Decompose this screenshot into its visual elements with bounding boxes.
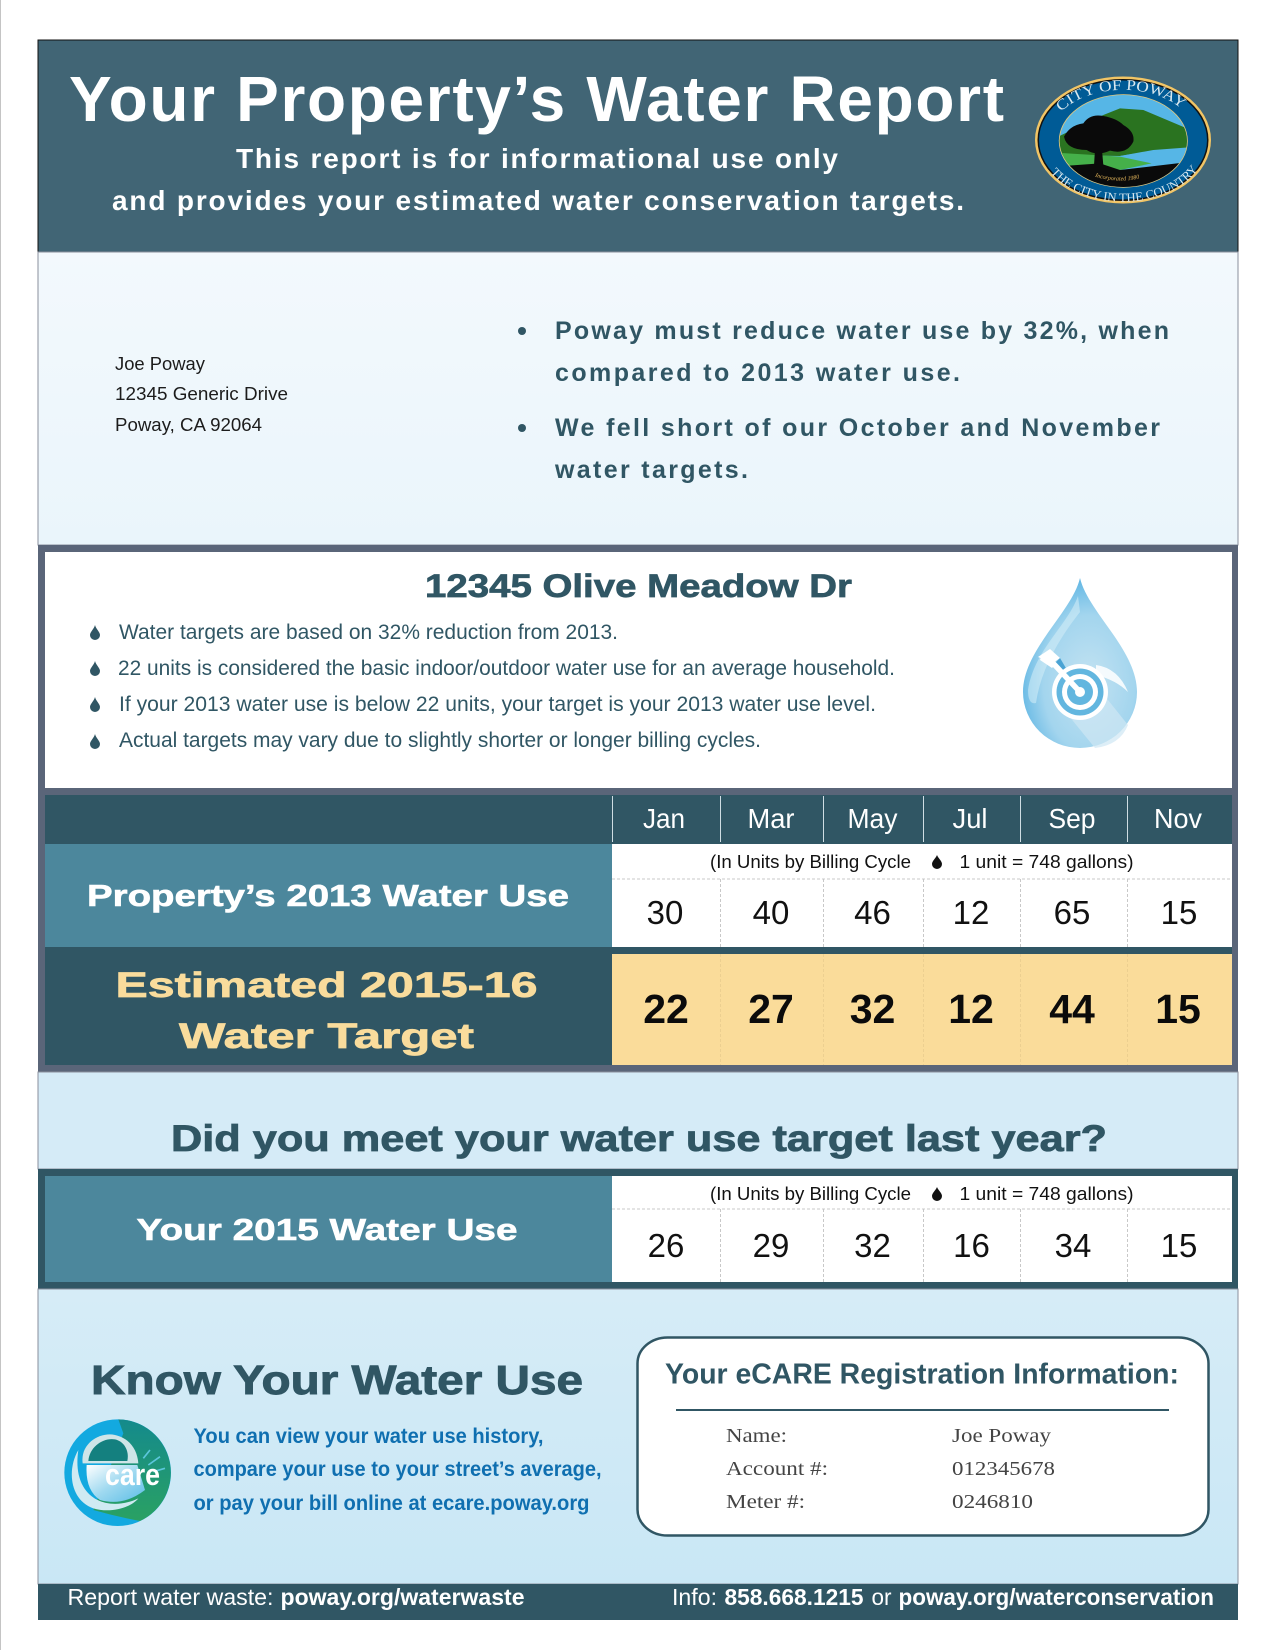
key messages: compared to 2013 water use. <box>555 359 960 387</box>
registration details <box>726 1425 1055 1513</box>
heading: know your water use: Know Your Water Use <box>91 1357 583 1403</box>
panel: header banner <box>38 40 1238 252</box>
row: 2013 water use: 12 <box>953 894 989 931</box>
registration details: 012345678 <box>952 1458 1055 1480</box>
table: 2013 use and estimated target <box>45 795 1232 1065</box>
table header row <box>45 795 1232 844</box>
row: estimated water target: 12 <box>948 986 994 1032</box>
registration details: Name: <box>726 1425 787 1447</box>
table header row: May <box>848 803 898 834</box>
row: estimated water target: 27 <box>748 986 794 1032</box>
registration details: Joe Poway <box>952 1425 1051 1447</box>
row: estimated water target: 22 <box>643 986 689 1032</box>
table header row: Mar <box>748 803 794 834</box>
footer bar: or <box>872 1584 892 1610</box>
row: estimated water target <box>45 954 1232 1065</box>
row: estimated water target: 32 <box>850 986 895 1032</box>
row: estimated water target: 15 <box>1155 986 1201 1032</box>
subtitle: This report is for informational use only <box>236 143 838 174</box>
table: 2015 water use: 1 unit = 748 gallons) <box>960 1184 1134 1204</box>
heading: did you meet target: Did you meet your water use target last year? <box>171 1118 1107 1159</box>
table: 2015 water use: 34 <box>1055 1227 1091 1264</box>
table: 2015 water use <box>38 1169 1238 1289</box>
row: estimated water target: 44 <box>1049 986 1095 1032</box>
notes list <box>90 620 895 752</box>
registration details: Meter #: <box>726 1491 805 1513</box>
panel: address and key messages <box>38 252 1238 545</box>
panel: know your water use <box>38 1289 1238 1584</box>
table: 2015 water use: 16 <box>953 1227 990 1264</box>
registration details: Account #: <box>726 1458 828 1480</box>
icon: water drop with target <box>1023 578 1137 748</box>
notes list: Water targets are based on 32% reduction from 2013. <box>119 620 618 644</box>
key messages: water targets. <box>554 456 748 484</box>
table header row: Sep <box>1048 803 1096 834</box>
footer bar: poway.org/waterwaste <box>280 1584 524 1610</box>
key messages: Poway must reduce water use by 32%, when <box>555 317 1169 345</box>
notes list: If your 2013 water use is below 22 units, your target is your 2013 water use level. <box>119 692 876 716</box>
row: 2013 water use <box>45 844 1232 954</box>
footer bar: poway.org/waterconservation <box>898 1584 1214 1610</box>
registration details: 0246810 <box>952 1491 1033 1513</box>
text: ecare description <box>194 1425 602 1515</box>
text: ecare description: You can view your water use history, <box>194 1425 544 1448</box>
key messages <box>518 317 1169 484</box>
notes list: 22 units is considered the basic indoor/outdoor water use for an average household. <box>118 656 895 680</box>
icon: City of Poway seal: THE CITY IN THE COUNTRY <box>1052 164 1196 202</box>
table: 2015 water use: 29 <box>753 1227 789 1264</box>
title: Your Property’s Water Report <box>69 63 1004 135</box>
row: estimated water target: Water Target <box>179 1017 474 1056</box>
row: estimated water target: Estimated 2015-16 <box>116 966 538 1005</box>
footer bar: 858.668.1215 <box>724 1584 864 1610</box>
row: 2013 water use: 1 unit = 748 gallons) <box>960 852 1134 872</box>
table header row: Jul <box>952 803 988 834</box>
heading: property address: 12345 Olive Meadow Dr <box>425 568 852 604</box>
table: 2015 water use: (In Units by Billing Cycle <box>710 1184 911 1204</box>
table: 2015 water use: Your 2015 Water Use <box>136 1212 518 1247</box>
address block: Joe Poway <box>115 354 205 374</box>
address block: 12345 Generic Drive <box>115 384 288 404</box>
icon: City of Poway seal: Incorporated 1980 <box>1095 173 1139 181</box>
row: 2013 water use: 15 <box>1161 894 1197 931</box>
notes list: Actual targets may vary due to slightly shorter or longer billing cycles. <box>119 728 761 752</box>
table header row: Nov <box>1154 803 1202 834</box>
subtitle: and provides your estimated water conservation targets. <box>112 185 964 216</box>
row: 2013 water use: 40 <box>753 894 789 931</box>
icon: City of Poway seal: CITY OF POWAY <box>1057 80 1187 110</box>
panel: notes <box>45 552 1232 788</box>
icon: eCare logo <box>64 1419 171 1526</box>
text: ecare description: or pay your bill online at ecare.poway.org <box>194 1492 590 1515</box>
panel: property targets frame <box>38 545 1238 1072</box>
icon: eCare logo: care <box>105 1457 160 1492</box>
footer bar: Info: <box>672 1584 717 1610</box>
table: 2015 water use: 15 <box>1161 1227 1197 1264</box>
icon: City of Poway seal <box>1035 76 1211 204</box>
subtitle <box>112 143 964 216</box>
table header row: Jan <box>643 803 685 834</box>
table: 2015 water use: 32 <box>854 1227 891 1264</box>
footer bar <box>38 1584 1238 1620</box>
address block <box>115 354 288 435</box>
row: 2013 water use: Property’s 2013 Water Use <box>87 878 569 913</box>
row: 2013 water use: 46 <box>854 894 891 931</box>
text: ecare description: compare your use to your street’s average, <box>194 1458 602 1481</box>
footer bar: Report water waste: <box>68 1584 274 1610</box>
row: 2013 water use: 30 <box>647 894 683 931</box>
panel: eCARE registration box <box>638 1338 1208 1536</box>
panel: eCARE registration box: Your eCARE Registration Information: <box>665 1358 1179 1390</box>
table: 2015 water use: 26 <box>648 1227 684 1264</box>
row: 2013 water use: 65 <box>1054 894 1090 931</box>
panel: last year question <box>38 1072 1238 1169</box>
row: 2013 water use: (In Units by Billing Cycle <box>710 852 911 872</box>
address block: Poway, CA 92064 <box>115 415 262 435</box>
key messages: We fell short of our October and November <box>555 414 1160 442</box>
